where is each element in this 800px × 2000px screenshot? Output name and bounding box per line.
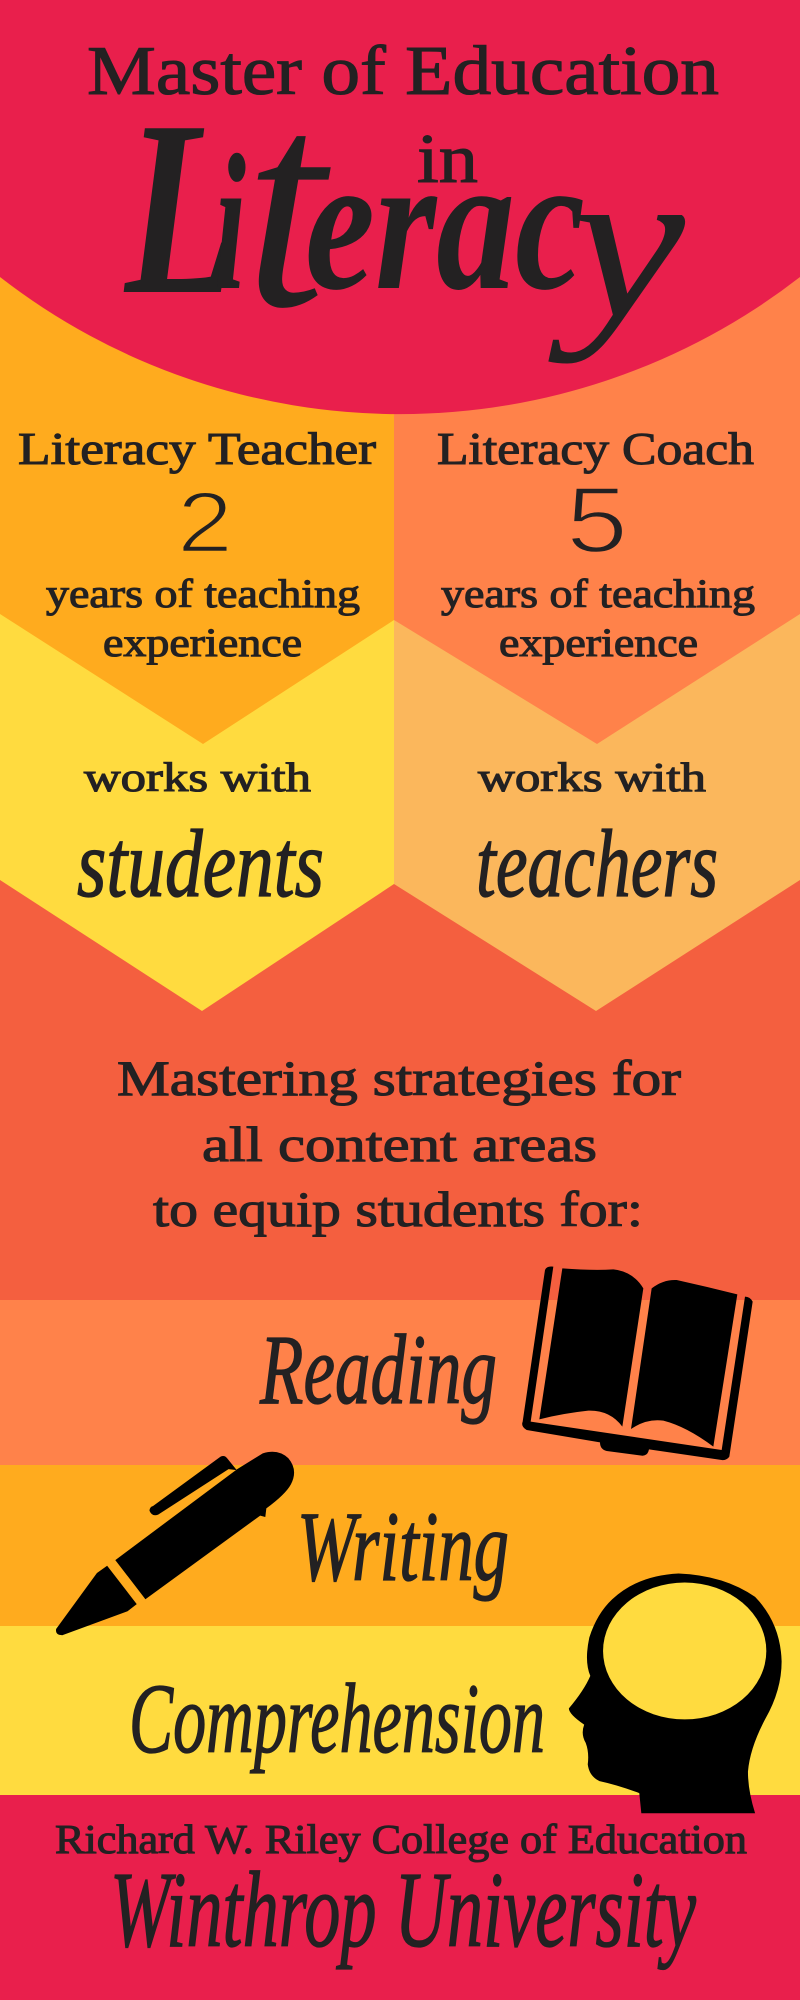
icon: head silhouette [569,1573,782,1813]
text: years of teaching experience (teacher) [46,571,360,665]
icon: pen [56,1452,294,1635]
text: years of teaching experience (teacher): experience [103,620,302,665]
title: literacy script: L [124,70,237,347]
panel: works with students chevron [0,600,394,1011]
panel: header arc [0,0,800,414]
heading: literacy coach: Literacy Coach [437,424,754,474]
text: works with teachers: teachers [476,810,718,917]
number: 2: 2 [177,475,233,571]
text: years of teaching experience (coach): experience [499,620,698,665]
text: years of teaching experience (coach) [441,571,755,665]
text: mastering strategies [117,1050,681,1237]
label: writing: Writing [297,1491,509,1602]
panel: works with teachers chevron [394,600,800,1011]
text: works with teachers: works with [478,754,706,800]
band: reading [0,1300,800,1465]
title: master of education: Master of Education [87,33,719,110]
title: literacy script: erac [305,115,585,331]
band: footer [0,1795,800,2000]
text: years of teaching experience (coach): years of teaching [441,571,755,616]
band: writing [0,1465,800,1626]
label: comprehension: Comprehension [129,1663,545,1774]
text: works with students: students [77,810,324,917]
icon: open book [522,1266,753,1460]
heading: literacy teacher: Literacy Teacher [18,424,376,474]
panel: literacy coach [394,270,800,744]
title: in: in [417,121,478,198]
text: works with teachers [476,754,718,917]
background: strategies panel [0,880,800,1300]
title: literacy script: t [245,38,335,370]
text: works with students [77,754,324,917]
panel: literacy teacher [0,270,394,744]
text: mastering strategies: all content areas [202,1116,597,1172]
band: comprehension [0,1626,800,1795]
title: literacy script: y [548,120,685,364]
text: works with students: works with [84,754,311,800]
label: reading: Reading [259,1314,497,1425]
text: mastering strategies: to equip students for: [153,1181,643,1237]
text: college name: Richard W. Riley College of Education [55,1816,747,1862]
title: literacy script: i [214,115,246,331]
text: years of teaching experience (teacher): years of teaching [46,571,360,616]
number: 5: 5 [566,467,628,572]
text: mastering strategies: Mastering strategies for [117,1050,681,1106]
